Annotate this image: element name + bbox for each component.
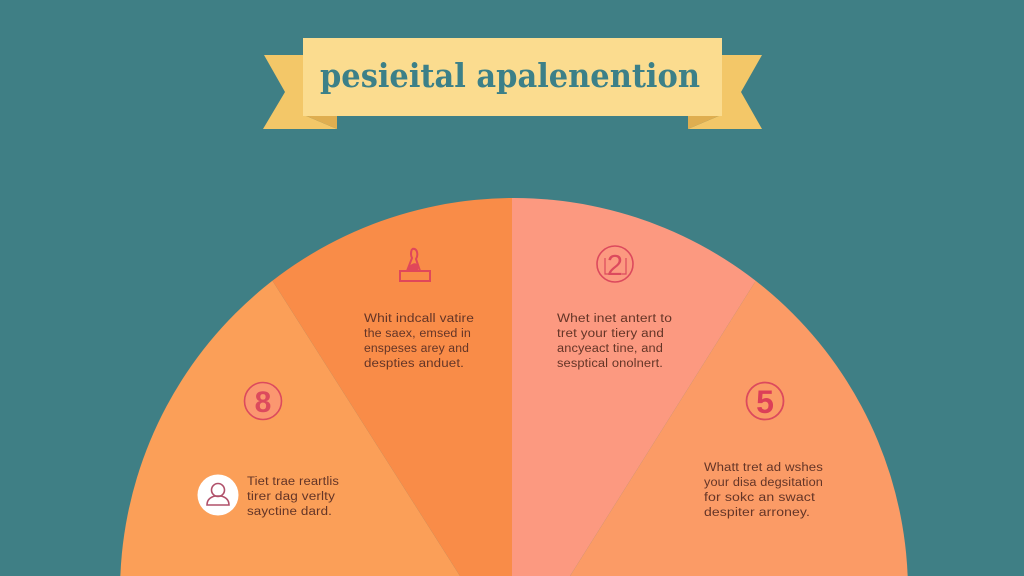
text block: lower right: your disa degsitation <box>704 477 823 489</box>
text block: upper left: the saex, emsed in <box>364 328 471 340</box>
text block: upper right: Whet inet antert to <box>557 313 672 325</box>
icon: number 8 <box>244 382 282 420</box>
icon: cup marker <box>400 249 430 281</box>
text block: upper right: sesptical onolnert. <box>557 358 663 370</box>
title: pesieital apalenention <box>320 56 700 95</box>
text block: upper left: despties anduet. <box>364 358 464 370</box>
text block: lower right: Whatt tret ad wshes <box>704 462 823 474</box>
ribbon right fold <box>688 115 721 129</box>
text block: lower left: sayctine dard. <box>247 506 332 518</box>
text block: upper right: ancyeact tine, and <box>557 343 663 355</box>
icon: number 2: 2 <box>607 250 623 282</box>
text block: lower left: Tiet trae reartlis <box>247 476 339 488</box>
text block: upper left: enspeses arey and <box>364 343 469 355</box>
segment: inner right <box>512 180 755 576</box>
ribbon right tail <box>688 55 762 129</box>
icon: number 2 <box>597 246 633 282</box>
pie chart <box>100 180 930 576</box>
icon: number 5 <box>746 382 784 420</box>
icon: number 5: 5 <box>756 384 774 420</box>
title ribbon <box>263 38 762 129</box>
text block: upper left: Whit indcall vatire <box>364 313 474 325</box>
text block: lower right: despiter arroney. <box>704 507 810 519</box>
ribbon left tail <box>263 55 337 129</box>
segment: far left <box>120 280 460 576</box>
text block: lower left: tirer dag verlty <box>247 491 335 503</box>
text block: upper right: tret your tiery and <box>557 328 664 340</box>
icon: number 8: 8 <box>255 386 271 419</box>
ribbon banner <box>303 38 722 116</box>
text block: lower right: for sokc an swact <box>704 492 816 504</box>
segment: far right <box>570 280 908 576</box>
segment: inner left <box>272 180 512 576</box>
ribbon left fold <box>304 115 337 129</box>
icon: person badge <box>198 474 238 516</box>
